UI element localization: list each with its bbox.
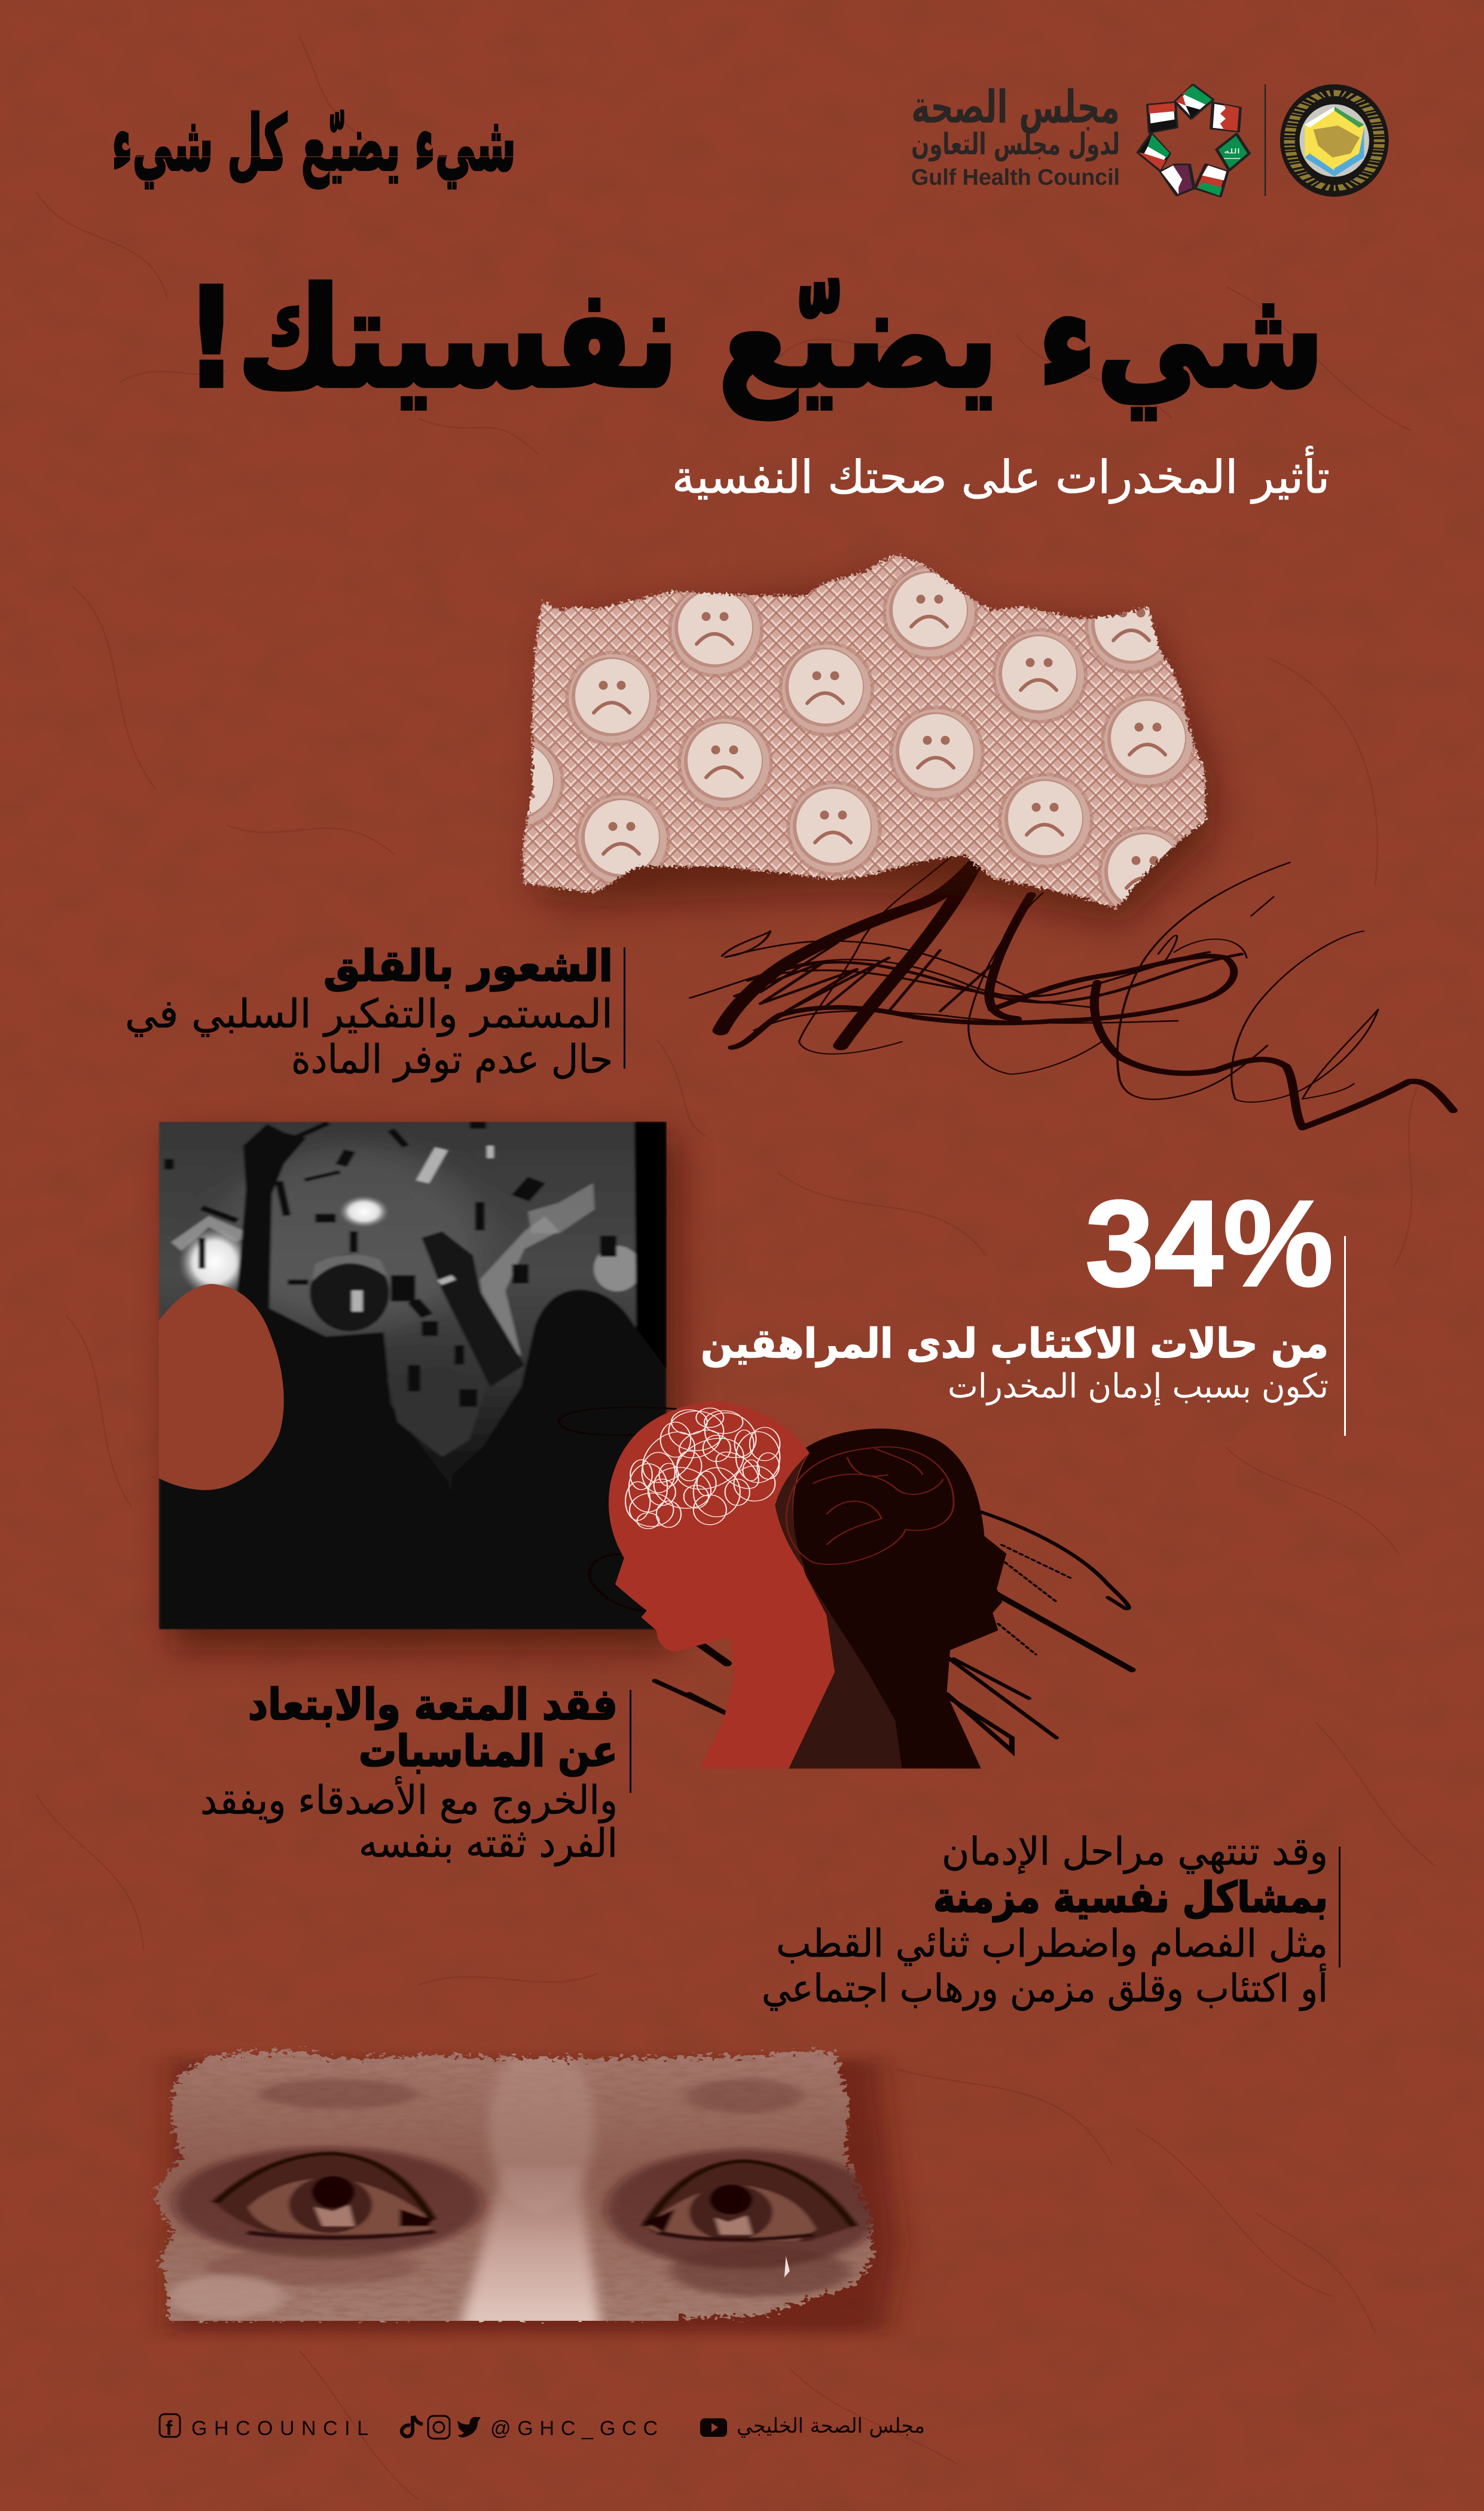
eyes shadow <box>167 2060 899 2333</box>
logo: Gulf Health Council wordmark: مجلس الصحة <box>911 80 1120 133</box>
crying eyes photo <box>149 2046 877 2325</box>
text block: 34 percent: تكون بسبب إدمان المخدرات <box>948 1367 1329 1406</box>
text block: 34 percent: 34% <box>1085 1175 1333 1312</box>
scribble <box>690 855 1454 1128</box>
logo: GCC seal <box>1280 84 1389 197</box>
scribbles around heads <box>559 1407 1132 1751</box>
text block: 34 percent: من حالات الاكتئاب لدى المراهقين <box>701 1320 1329 1368</box>
footer socials: @GHC_GCC <box>490 2417 658 2440</box>
left eye <box>216 2153 432 2235</box>
logo: flags star: الله <box>1224 147 1240 155</box>
heads illustration <box>559 1401 1132 1768</box>
text block: loss of pleasure: الفرد ثقته بنفسه <box>359 1820 618 1866</box>
logo: Gulf Health Council wordmark: Gulf Health Council <box>911 165 1120 190</box>
red head <box>609 1401 835 1768</box>
footer socials: مجلس الصحة الخليجي <box>737 2414 925 2438</box>
text block: anxiety: حال عدم توفر المادة <box>291 1036 613 1082</box>
icon: youtube <box>700 2418 727 2437</box>
title: شيء يضيّع نفسيتك! <box>185 259 1324 419</box>
logo: Gulf Health Council wordmark: لدول مجلس التعاون <box>911 127 1120 162</box>
right eye <box>646 2161 854 2242</box>
text block: 34 percent <box>701 1175 1346 1436</box>
subtitle: تأثير المخدرات على صحتك النفسية <box>672 446 1330 504</box>
text block: loss of pleasure <box>200 1679 631 1866</box>
text block: anxiety <box>125 941 625 1082</box>
logo divider <box>1265 84 1266 196</box>
text block: chronic problems: مثل الفصام واضطراب ثنائي القطب <box>776 1922 1328 1966</box>
party photo <box>158 1121 667 1630</box>
photo shadow <box>170 1136 679 1650</box>
text block: chronic problems: بمشاكل نفسية مزمنة <box>933 1873 1328 1922</box>
icon: instagram <box>428 2416 450 2439</box>
text block: loss of pleasure: عن المناسبات <box>359 1726 618 1777</box>
footer socials <box>160 2414 925 2440</box>
pill blister with sad faces <box>520 553 1208 910</box>
logo: flags star <box>1138 85 1249 196</box>
text block: anxiety: المستمر والتفكير السلبي في <box>125 991 613 1037</box>
text block: chronic problems: أو اكتئاب وقلق مزمن ورهاب اجتماعي <box>762 1963 1328 2011</box>
dark head <box>775 1429 1006 1768</box>
text block: loss of pleasure: فقد المتعة والابتعاد <box>248 1679 618 1730</box>
overlap of heads <box>789 1576 902 1768</box>
tangled brain <box>625 1408 780 1528</box>
icon: twitter <box>457 2417 481 2437</box>
calm brain outline <box>786 1447 954 1564</box>
text block: loss of pleasure: والخروج مع الأصدقاء ويفقد <box>200 1775 618 1823</box>
hole cut in photo <box>158 1284 284 1490</box>
icon: facebook: f <box>166 2417 173 2440</box>
footer socials: GHCOUNCIL <box>191 2417 368 2440</box>
icon: facebook <box>160 2414 180 2440</box>
text block: chronic problems <box>762 1830 1341 2011</box>
icon: tiktok <box>402 2416 423 2436</box>
logo: Gulf Health Council wordmark <box>911 80 1120 190</box>
text block: chronic problems: وقد تنتهي مراحل الإدمان <box>942 1830 1328 1874</box>
pill blister shadow <box>535 574 1214 924</box>
text block: anxiety: الشعور بالقلق <box>323 941 613 991</box>
slogan top left: شيء يضيّع كل شيء <box>112 99 516 188</box>
